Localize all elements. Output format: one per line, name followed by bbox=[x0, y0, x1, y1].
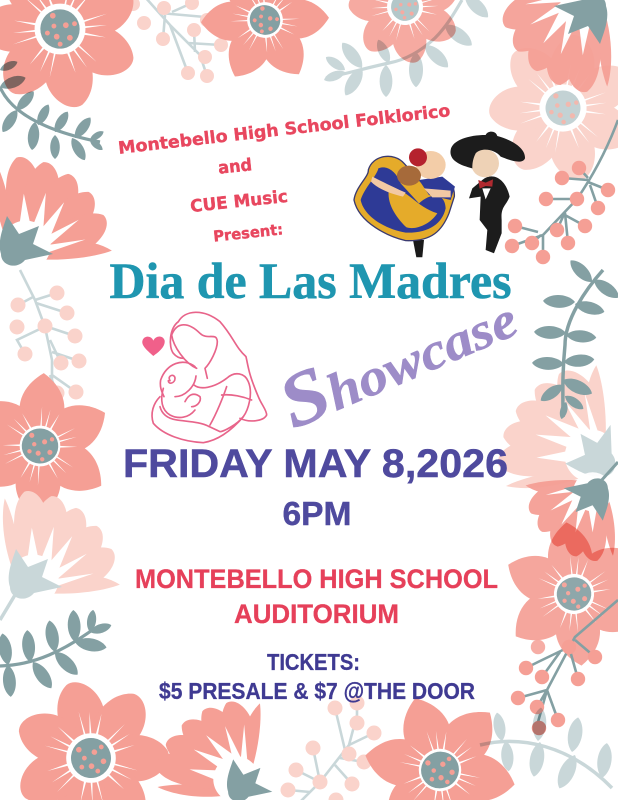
calyx: salmon right with stem bbox=[564, 462, 618, 521]
flower: left middle bbox=[0, 369, 118, 523]
presenter line 2: and bbox=[217, 155, 253, 179]
flower: top right pale daisy bbox=[473, 22, 618, 197]
sprig: lower right berries bbox=[511, 600, 618, 735]
text: venue line 1: MONTEBELLO HIGH SCHOOL bbox=[135, 564, 498, 594]
text: venue line 2: AUDITORIUM bbox=[234, 599, 399, 629]
text: time: 6PM bbox=[282, 495, 352, 532]
presenter line 3: CUE Music bbox=[189, 187, 289, 217]
flower: bottom right of centre bbox=[342, 673, 538, 800]
flower: top right fan bbox=[492, 0, 616, 95]
text: Showcase: Showcase bbox=[267, 271, 528, 445]
flower: top left daisy bbox=[0, 0, 157, 128]
dancer: woman bbox=[354, 148, 455, 257]
branch: bottom right pale leaves bbox=[480, 707, 614, 791]
calyx: pale right bbox=[564, 418, 618, 479]
icon: mother and baby bbox=[142, 312, 267, 443]
calyx: bottom bbox=[227, 759, 272, 800]
sprig: top middle pale berries bbox=[126, 0, 228, 83]
flower: bottom left daisy bbox=[0, 662, 190, 800]
flower: right lower bbox=[493, 515, 618, 673]
branch: lower left leaves bbox=[0, 609, 113, 697]
text: ticket prices: $5 PRESALE & $7 @THE DOOR bbox=[159, 678, 475, 704]
illustration: folklorico dancers bbox=[354, 132, 525, 257]
flower: salmon fan right bbox=[524, 469, 615, 562]
calyx: left bbox=[0, 216, 53, 266]
presenter line 1: Montebello High School Folklorico bbox=[117, 101, 451, 159]
flower: pale fan right bbox=[493, 362, 618, 489]
sprig: bottom pale berries bbox=[280, 696, 382, 800]
flower: top daisy bbox=[333, 0, 476, 79]
flower: top centre bbox=[177, 0, 353, 107]
dancer: man bbox=[450, 132, 525, 253]
branch: top right pale leaves bbox=[322, 0, 492, 99]
flower: left fan bbox=[0, 152, 115, 276]
branch: upper left leaves bbox=[0, 58, 105, 163]
title: Dia de Las Madres bbox=[110, 254, 512, 310]
text: date: FRIDAY MAY 8,2026 bbox=[123, 442, 508, 486]
calyx: top right bbox=[554, 0, 607, 44]
sprig: left pale berries bbox=[10, 270, 86, 400]
branch: right side vertical leaves bbox=[532, 256, 618, 420]
text: tickets label: TICKETS: bbox=[267, 649, 360, 675]
flower: bottom fan bbox=[150, 682, 279, 800]
presenter text bbox=[117, 101, 451, 246]
calyx: pale left with stem bbox=[0, 549, 62, 620]
flower: pale left fan bbox=[2, 486, 123, 610]
sprig: right berries bbox=[505, 120, 618, 264]
presenter line 4: Present: bbox=[212, 220, 284, 246]
icon: heart bbox=[142, 337, 165, 356]
